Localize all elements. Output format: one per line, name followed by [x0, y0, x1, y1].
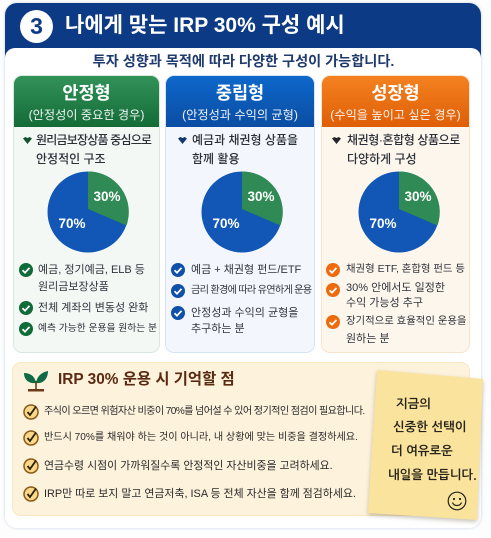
note text: 지금의 [396, 398, 431, 410]
check list: 예측 가능한 운용을 원하는 분 [38, 323, 157, 334]
summary text: 원리금보장상품 중심으로 [36, 133, 151, 147]
sticky note: 더 여유로운 [391, 445, 453, 457]
check list: 예금, 정기예금, ELB 등 [38, 264, 145, 276]
check list: 금리 환경에 따라 유연하게 운용 [191, 285, 311, 296]
sticky note: 신중한 선택이 [393, 421, 466, 433]
summary text [36, 133, 152, 166]
check list [326, 263, 466, 345]
reminder list [23, 404, 365, 502]
subtitle: 투자 성향과 목적에 따라 다양한 구성이 가능합니다. [93, 54, 394, 70]
check list [171, 263, 312, 335]
check list: 장기적으로 효율적인 운용을 [346, 316, 466, 327]
note paper [366, 370, 486, 524]
pie chart 70/30: 70% [212, 216, 240, 231]
card header: (수익을 높이고 싶은 경우) [330, 108, 461, 122]
icon: smiley [448, 492, 466, 510]
card header [165, 75, 315, 127]
bullet heart [23, 137, 32, 144]
card header: 안정형 [62, 83, 111, 103]
summary text: 함께 활용 [192, 152, 240, 166]
pie chart 70/30: 30% [247, 189, 275, 204]
icon: sprout [24, 371, 48, 392]
check list: 원리금보장상품 [38, 281, 109, 293]
icon: step number 3: 3 [30, 13, 43, 39]
panel: growth type [321, 75, 470, 353]
card header: 성장형 [371, 83, 420, 103]
pie chart 70/30 [358, 172, 440, 252]
bullet heart [332, 137, 341, 144]
check list: 원하는 분 [346, 333, 390, 345]
check list: 전체 계좌의 변동성 완화 [38, 302, 148, 314]
bullet heart [178, 137, 187, 144]
pie chart 70/30: 30% [93, 189, 121, 204]
check list: 30% 안에서도 일정한 [346, 282, 445, 294]
card header: (안정성이 중요한 경우) [29, 108, 144, 122]
summary text: 채권형·혼합형 상품으로 [347, 133, 460, 147]
pie chart 70/30: 70% [58, 216, 86, 231]
check list: 추구하는 분 [191, 323, 245, 335]
reminder list: 연금수령 시점이 가까워질수록 안정적인 자산비중을 고려하세요. [44, 460, 333, 472]
panel: reminders [12, 362, 470, 516]
reminder list: 주식이 오르면 위험자산 비중이 70%를 넘어설 수 있어 정기적인 점검이 필요합니다. [44, 406, 365, 417]
pie chart 70/30 [202, 172, 283, 252]
heading: IRP 30% 운용 시 기억할 점 [58, 371, 235, 388]
card header [13, 75, 160, 127]
check list: 채권형 ETF, 혼합형 펀드 등 [346, 264, 465, 275]
icon: step number 3 [20, 10, 53, 43]
check list: 수익 가능성 추구 [346, 297, 423, 309]
check list: 예금 + 채권형 펀드/ETF [191, 264, 301, 276]
panel: stable type [13, 75, 160, 353]
pie chart 70/30: 30% [404, 189, 432, 204]
pie chart 70/30 [48, 172, 129, 252]
sticky note [366, 370, 486, 524]
header band [5, 3, 481, 59]
summary text: 예금과 채권형 상품을 [192, 133, 298, 147]
reminder list: 반드시 70%를 채워야 하는 것이 아니라, 내 상황에 맞는 비중을 결정하세요. [44, 432, 358, 443]
card header [321, 75, 470, 127]
panel: balanced type [165, 75, 315, 353]
reminder list: IRP만 따로 보지 말고 연금저축, ISA 등 전체 자산을 함께 점검하세요. [44, 488, 356, 500]
title: 나에게 맞는 IRP 30% 구성 예시 [65, 14, 345, 37]
card header: 중립형 [216, 83, 264, 103]
check list: 안정성과 수익의 균형을 [191, 307, 298, 319]
summary text: 안정적인 구조 [36, 152, 106, 166]
summary text [192, 133, 298, 166]
summary text [347, 133, 460, 166]
check list [19, 263, 157, 336]
sticky note: 내일을 만듭니다. [388, 469, 477, 481]
card header: (안정성과 수익의 균형) [182, 108, 298, 122]
pie chart 70/30: 70% [369, 216, 397, 231]
summary text: 다양하게 구성 [347, 152, 417, 166]
